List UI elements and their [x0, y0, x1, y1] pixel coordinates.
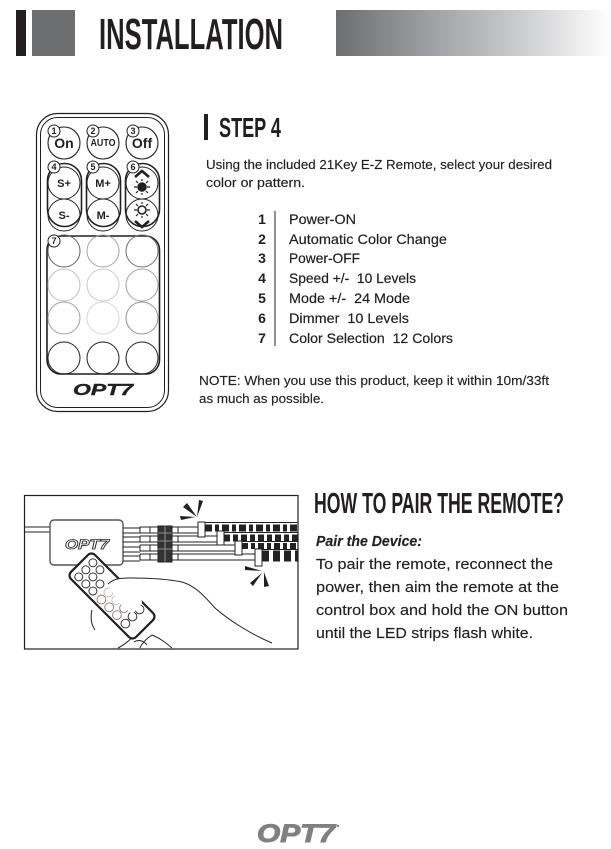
control box	[25, 520, 140, 565]
pairing instructions	[316, 533, 568, 642]
remote button legend: 6	[258, 310, 266, 326]
button labels: 3	[130, 126, 136, 136]
remote control diagram	[36, 114, 168, 412]
header gradient bar	[336, 10, 611, 56]
remote button legend: Mode +/- 24 Mode	[289, 290, 410, 306]
button labels: S-	[58, 210, 70, 222]
pairing instructions: power, then aim the remote at the	[316, 579, 559, 596]
button labels: M-	[97, 210, 110, 222]
remote button legend: Power-OFF	[289, 250, 360, 266]
remote button legend	[258, 211, 453, 346]
button labels: On	[54, 135, 74, 151]
flash marks	[180, 500, 269, 587]
hand lower fingers behind remote	[91, 610, 172, 648]
control box: OPT7	[65, 536, 110, 552]
pairing instructions: Pair the Device:	[316, 533, 422, 550]
illustration frame	[24, 496, 298, 649]
remote button legend: Dimmer 10 Levels	[289, 310, 409, 326]
remote button legend: 5	[258, 290, 266, 306]
remote button legend: 3	[258, 250, 266, 266]
number badges	[48, 125, 139, 247]
top buttons	[48, 127, 158, 159]
footer logo: OPT7	[257, 820, 336, 848]
button labels: 5	[90, 162, 96, 172]
header band	[16, 10, 611, 59]
pairing instructions: until the LED strips flash white.	[316, 625, 533, 642]
step title: STEP 4	[219, 112, 281, 143]
step intro text: color or pattern.	[206, 175, 305, 190]
remote button legend: Power-ON	[289, 211, 356, 227]
pairing instructions: To pair the remote, reconnect the	[316, 556, 553, 573]
button groups	[47, 164, 160, 374]
button labels: 4	[51, 162, 57, 172]
pairing illustration	[24, 496, 298, 649]
range note	[199, 373, 549, 406]
colour buttons	[48, 235, 158, 374]
button labels: 7	[51, 236, 57, 246]
range note: NOTE: When you use this product, keep it within 10m/33ft	[199, 373, 549, 388]
button labels: 6	[130, 162, 136, 172]
step marker bar	[204, 114, 208, 140]
remote button legend: Automatic Color Change	[289, 231, 447, 247]
button labels: Off	[132, 135, 152, 151]
title: INSTALLATION	[99, 10, 283, 59]
remote button legend: 1	[258, 211, 266, 227]
dimmer icons	[134, 171, 150, 227]
button labels	[51, 126, 152, 246]
small remote	[67, 551, 157, 641]
remote button legend: Speed +/- 10 Levels	[289, 270, 416, 286]
LED strips	[198, 522, 298, 566]
pairing instructions: control box and hold the ON button	[316, 602, 568, 619]
step heading	[204, 112, 281, 143]
button labels: 1	[51, 126, 57, 136]
button labels: M+	[95, 178, 111, 190]
header black bar	[16, 10, 26, 56]
connectors and wires	[140, 526, 255, 562]
header grey square	[32, 10, 75, 56]
remote button legend: 2	[258, 231, 266, 247]
step intro text	[206, 157, 552, 190]
remote button legend: Color Selection 12 Colors	[289, 330, 453, 346]
hand outline	[108, 578, 272, 643]
remote button legend: 4	[258, 270, 266, 286]
button labels: S+	[57, 178, 71, 190]
button labels: AUTO	[90, 138, 116, 149]
remote logo: OPT7	[73, 382, 135, 399]
step intro text: Using the included 21Key E-Z Remote, select your desired	[206, 157, 552, 172]
button labels: 2	[90, 126, 96, 136]
remote button legend: 7	[258, 330, 266, 346]
range note: as much as possible.	[199, 391, 324, 406]
